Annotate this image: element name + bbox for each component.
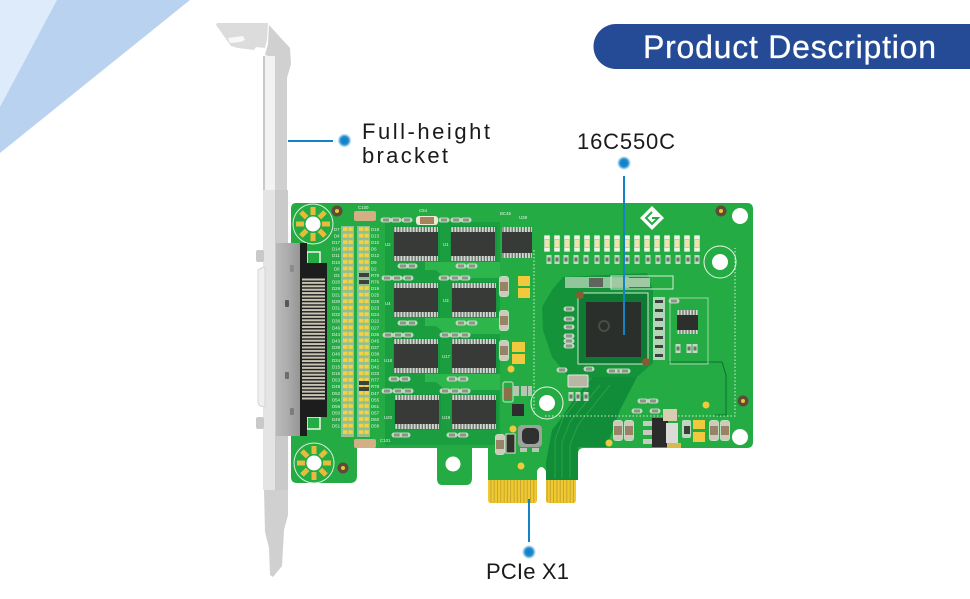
LED column silk labels: D55 — [371, 397, 380, 402]
LED column silk labels: D29 — [332, 286, 341, 291]
LED column silk labels: D27 — [371, 325, 380, 330]
full-height metal bracket — [216, 23, 291, 577]
LED column silk labels: D44 — [332, 332, 341, 337]
callout: Full-height bracket — [288, 119, 490, 168]
LED column silk labels: D13 — [371, 234, 380, 239]
heading text: Product Description — [643, 29, 936, 65]
inductor — [518, 425, 542, 447]
LED column silk labels: D12 — [371, 253, 380, 258]
metal D-sub shell behind bracket — [256, 250, 265, 429]
LED column silk labels: D46 — [332, 325, 341, 330]
LED column silk labels: D40 — [332, 351, 341, 356]
LED column silk labels: D25 — [371, 292, 380, 298]
LED column silk labels: D22 — [371, 319, 380, 324]
LED column silk labels: D47 — [371, 391, 380, 396]
trace lines — [555, 385, 610, 478]
LED column silk labels: D54 — [332, 397, 341, 402]
resistor column beside UART — [653, 297, 665, 360]
tapered tab — [264, 490, 288, 577]
LED column silk labels: D7 — [334, 227, 340, 232]
LED column silk labels: D43 — [332, 338, 341, 343]
chip silk labels: U4 — [385, 301, 391, 306]
LED column silk labels: D49 — [332, 417, 341, 422]
callout: Full-height bracket: Full-height — [362, 119, 490, 144]
LED column silk labels: D19 — [371, 286, 380, 291]
regulator — [643, 409, 691, 448]
chip silk labels: U19 — [442, 415, 451, 420]
large capacitors near edge of board — [354, 211, 438, 448]
left resistors near UART — [556, 306, 660, 414]
dark plane around the UART chip — [542, 273, 653, 387]
PCIe gold fingers — [488, 480, 576, 503]
LED column silk labels: D51 — [332, 424, 341, 429]
LED column silk labels: D42 — [371, 365, 380, 370]
LED column silk labels: D18 — [371, 227, 380, 232]
LED column silk labels: D32 — [332, 312, 341, 317]
chip silk labels: BC45 — [500, 211, 512, 216]
electrolytic capacitors — [495, 276, 730, 455]
chip silk labels: C100 — [358, 205, 369, 210]
logo — [640, 206, 664, 230]
regulator area chips at lower left — [503, 382, 539, 453]
chip silk labels: U3 — [443, 298, 449, 303]
LED column silk labels: D61 — [371, 404, 380, 409]
resistor row under LEDs — [546, 255, 700, 264]
small passives around chips — [380, 218, 478, 438]
LED column silk labels: D39 — [332, 345, 341, 350]
LED column silk labels: D10 — [371, 240, 380, 245]
LED column silk labels: D37 — [371, 345, 380, 350]
LED column silk labels: D11 — [332, 253, 340, 258]
LED column silk labels: D52 — [332, 391, 341, 396]
callout: PCIe X1: PCIe X1 — [486, 559, 569, 584]
small IC U23 — [668, 298, 708, 364]
LED column silk labels: D2 — [371, 266, 377, 271]
16C550C UART chip — [576, 291, 650, 366]
side flange — [265, 25, 291, 490]
background triangle: light blue — [0, 0, 190, 153]
callout: Full-height bracket: bracket — [362, 143, 448, 168]
LED column silk labels: D36 — [332, 319, 341, 324]
LED column silk labels: D38 — [371, 351, 380, 356]
LED column silk labels: D17 — [332, 240, 341, 245]
LED column silk labels: D41 — [371, 358, 380, 363]
chip silk labels: C54 — [419, 208, 428, 213]
PCIe traces plane — [546, 377, 637, 480]
LED column silk labels: D21 — [332, 292, 341, 298]
outlined copper block — [668, 362, 726, 415]
chip silk labels: U2 — [385, 242, 391, 247]
LED column silk labels: D48 — [332, 384, 341, 389]
LED column silk labels: D24 — [371, 312, 380, 317]
LED column silk labels: D10 — [332, 260, 341, 265]
LED column silk labels: D20 — [332, 279, 341, 284]
LED column silk labels: D3 — [334, 273, 340, 278]
LED column silk labels: R77 — [371, 378, 380, 383]
flange hook slot — [228, 36, 245, 43]
chip silk labels: C101 — [380, 438, 391, 443]
LED column silk labels: R78 — [371, 384, 380, 389]
header banner: Product Description — [594, 24, 970, 69]
callout: 16C550C — [577, 129, 675, 335]
callout: PCIe X1 — [486, 499, 569, 584]
dotted keepout line — [534, 248, 735, 416]
LED column silk labels: D45 — [371, 338, 380, 343]
LED indicator row — [544, 235, 700, 252]
LED pad columns — [341, 226, 370, 437]
PCB board — [291, 203, 753, 485]
chip silk labels: U18 — [384, 358, 393, 363]
right side holes and vias — [446, 206, 748, 472]
LED column silk labels: D58 — [371, 424, 380, 429]
LED column silk labels: D15 — [332, 365, 341, 370]
SCSI connector — [276, 243, 327, 436]
LED column silk labels: D33 — [371, 371, 380, 376]
background triangle: pale blue — [0, 0, 57, 107]
LED column silk labels: D30 — [332, 299, 341, 304]
LED column silk labels: D16 — [332, 371, 341, 376]
callout: 16C550C: 16C550C — [577, 129, 675, 154]
LED column silk labels: D35 — [371, 332, 380, 337]
chip silk labels: U1 — [443, 242, 449, 247]
LED column silk labels: D4 — [334, 234, 340, 239]
left channel — [263, 56, 265, 490]
LED column silk labels: D50 — [332, 410, 341, 415]
crystal Y1 — [568, 375, 588, 387]
lower strip shading — [263, 190, 275, 490]
LED column silk labels: D6 — [371, 247, 377, 252]
chip silk labels: U38 — [519, 215, 528, 220]
LED column silk labels: D28 — [371, 299, 380, 304]
dark plane around the serial chips — [385, 222, 500, 445]
LED column silk labels: D53 — [332, 378, 341, 383]
LED column silk labels: D56 — [332, 404, 341, 409]
small chip U38 — [502, 227, 532, 258]
LED column silk labels: R79 — [371, 273, 380, 278]
LED column silk labels — [332, 227, 380, 429]
LED column silk labels: D60 — [371, 417, 380, 422]
LED column silk labels: D9 — [371, 260, 377, 265]
chip silk labels: U20 — [384, 415, 393, 420]
LED column silk labels: D8 — [334, 266, 340, 271]
mounting pads: left top and bottom — [293, 204, 348, 483]
LED column silk labels: D14 — [332, 247, 341, 252]
chip silk labels: U17 — [442, 354, 451, 359]
top flange — [216, 23, 268, 50]
LED column silk labels: D57 — [371, 410, 380, 415]
LED column silk labels: R76 — [371, 279, 380, 284]
chip silk labels — [358, 205, 528, 443]
LED column silk labels: D23 — [371, 306, 380, 311]
LED column silk labels: D31 — [332, 306, 341, 311]
gold capacitor pads — [508, 276, 710, 470]
bright copper areas between chips — [425, 262, 500, 390]
LED column silk labels: D34 — [332, 358, 341, 363]
resistor pack row above UART — [565, 276, 673, 289]
serial driver chips, eight in two columns — [393, 226, 498, 430]
